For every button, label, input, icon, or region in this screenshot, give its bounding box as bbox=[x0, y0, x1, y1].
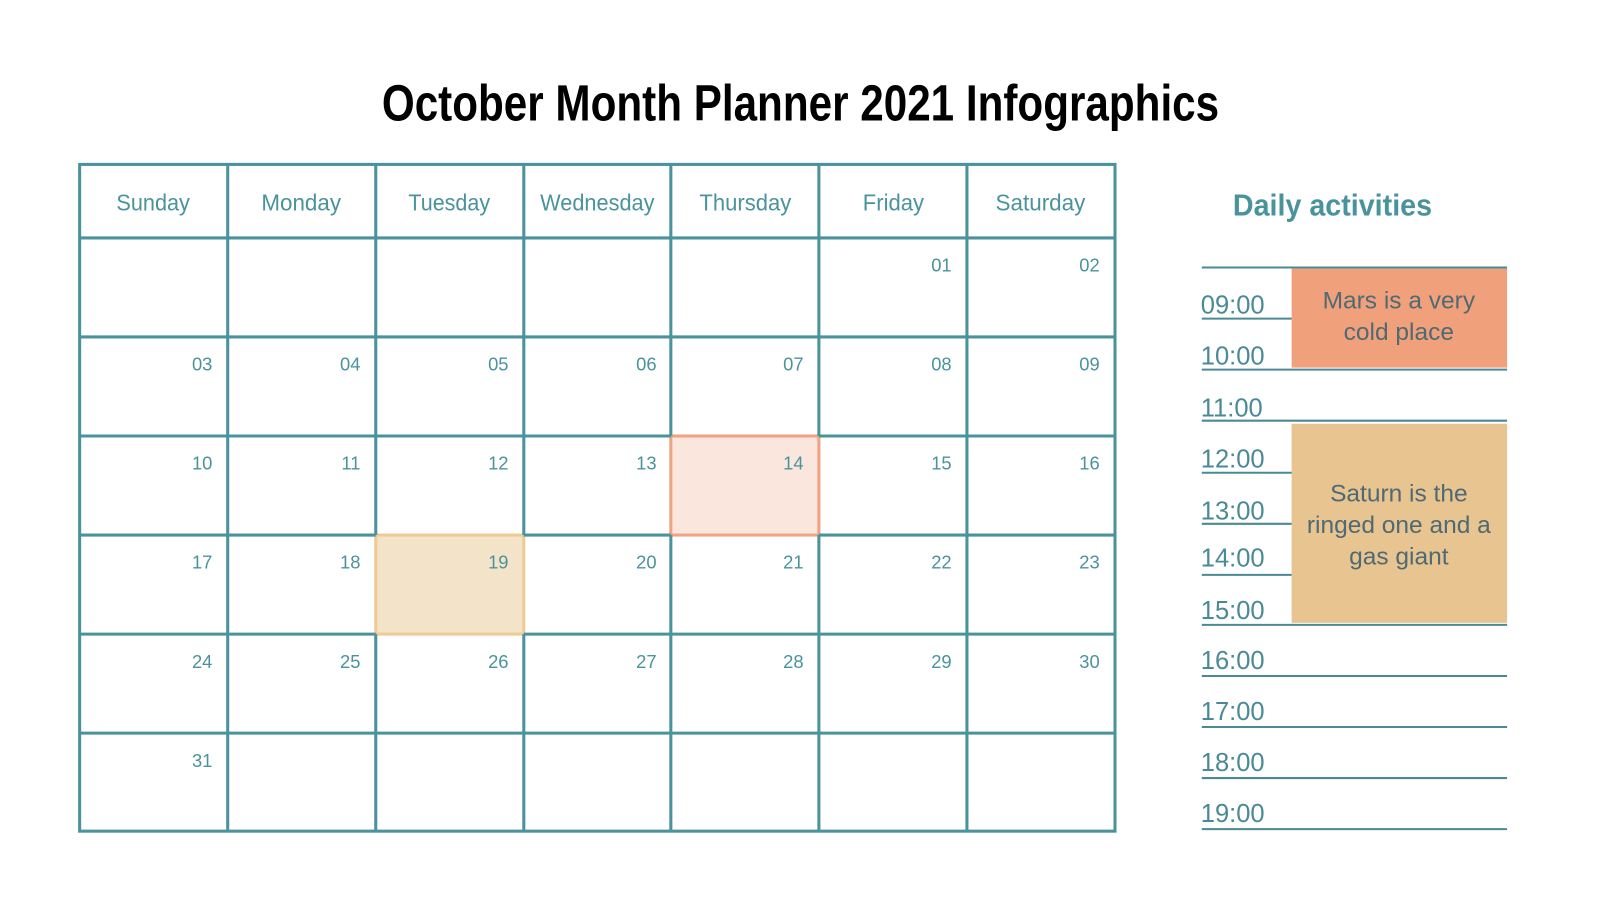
title: October Month Planner 2021 Infographics bbox=[382, 75, 1219, 132]
date numbers: 16 bbox=[1079, 453, 1100, 474]
event: Mars bbox=[1292, 269, 1507, 368]
time labels: 10:00 bbox=[1201, 343, 1265, 371]
time labels: 18:00 bbox=[1201, 749, 1265, 777]
date numbers: 31 bbox=[192, 750, 212, 771]
heading: daily activities: Daily activities bbox=[1233, 188, 1432, 222]
date numbers: 12 bbox=[488, 453, 508, 474]
date numbers: 08 bbox=[931, 354, 952, 375]
event: Mars: Mars is a very bbox=[1323, 287, 1476, 314]
date numbers: 21 bbox=[783, 552, 804, 573]
date numbers: 15 bbox=[931, 453, 952, 474]
time labels: 11:00 bbox=[1201, 395, 1263, 423]
time labels: 14:00 bbox=[1201, 545, 1265, 573]
date numbers: 20 bbox=[636, 552, 657, 573]
time labels: 15:00 bbox=[1201, 597, 1265, 625]
date numbers: 24 bbox=[192, 651, 212, 672]
time labels: 09:00 bbox=[1201, 291, 1265, 319]
date numbers: 25 bbox=[340, 651, 360, 672]
event: Mars: cold place bbox=[1344, 319, 1454, 346]
date numbers: 07 bbox=[783, 354, 804, 375]
day headers: Tuesday bbox=[408, 189, 490, 215]
date numbers bbox=[192, 255, 1100, 771]
date numbers: 29 bbox=[931, 651, 952, 672]
event: Saturn: ringed one and a bbox=[1307, 512, 1491, 539]
day headers bbox=[116, 189, 1086, 215]
event: Saturn: gas giant bbox=[1349, 544, 1449, 571]
time labels: 16:00 bbox=[1201, 647, 1265, 675]
time labels: 17:00 bbox=[1201, 698, 1265, 726]
date numbers: 27 bbox=[636, 651, 657, 672]
calendar bbox=[80, 164, 1115, 831]
date numbers: 23 bbox=[1079, 552, 1100, 573]
date numbers: 01 bbox=[931, 255, 952, 276]
event: Saturn bbox=[1292, 424, 1507, 623]
day headers: Wednesday bbox=[540, 189, 655, 215]
date numbers: 09 bbox=[1079, 354, 1100, 375]
highlight: 14 bbox=[671, 436, 819, 535]
day headers: Friday bbox=[863, 189, 924, 215]
date numbers: 03 bbox=[192, 354, 212, 375]
time labels: 12:00 bbox=[1201, 446, 1265, 474]
time labels: 19:00 bbox=[1201, 800, 1265, 828]
day headers: Saturday bbox=[996, 189, 1086, 215]
time labels bbox=[1201, 291, 1265, 828]
date numbers: 30 bbox=[1079, 651, 1100, 672]
date numbers: 19 bbox=[488, 552, 508, 573]
date numbers: 13 bbox=[636, 453, 657, 474]
date numbers: 22 bbox=[931, 552, 952, 573]
event: Saturn: Saturn is the bbox=[1330, 480, 1468, 507]
date numbers: 14 bbox=[783, 453, 804, 474]
date numbers: 10 bbox=[192, 453, 212, 474]
date numbers: 26 bbox=[488, 651, 508, 672]
daily schedule bbox=[1201, 268, 1507, 829]
date numbers: 17 bbox=[192, 552, 212, 573]
date numbers: 05 bbox=[488, 354, 508, 375]
date numbers: 18 bbox=[340, 552, 360, 573]
date numbers: 06 bbox=[636, 354, 657, 375]
day headers: Thursday bbox=[699, 189, 792, 215]
date numbers: 28 bbox=[783, 651, 804, 672]
highlight: 19 bbox=[376, 535, 524, 634]
time labels: 13:00 bbox=[1201, 498, 1265, 526]
day headers: Monday bbox=[261, 189, 341, 215]
day headers: Sunday bbox=[116, 189, 190, 215]
date numbers: 11 bbox=[341, 453, 360, 474]
date numbers: 04 bbox=[340, 354, 360, 375]
date numbers: 02 bbox=[1079, 255, 1100, 276]
